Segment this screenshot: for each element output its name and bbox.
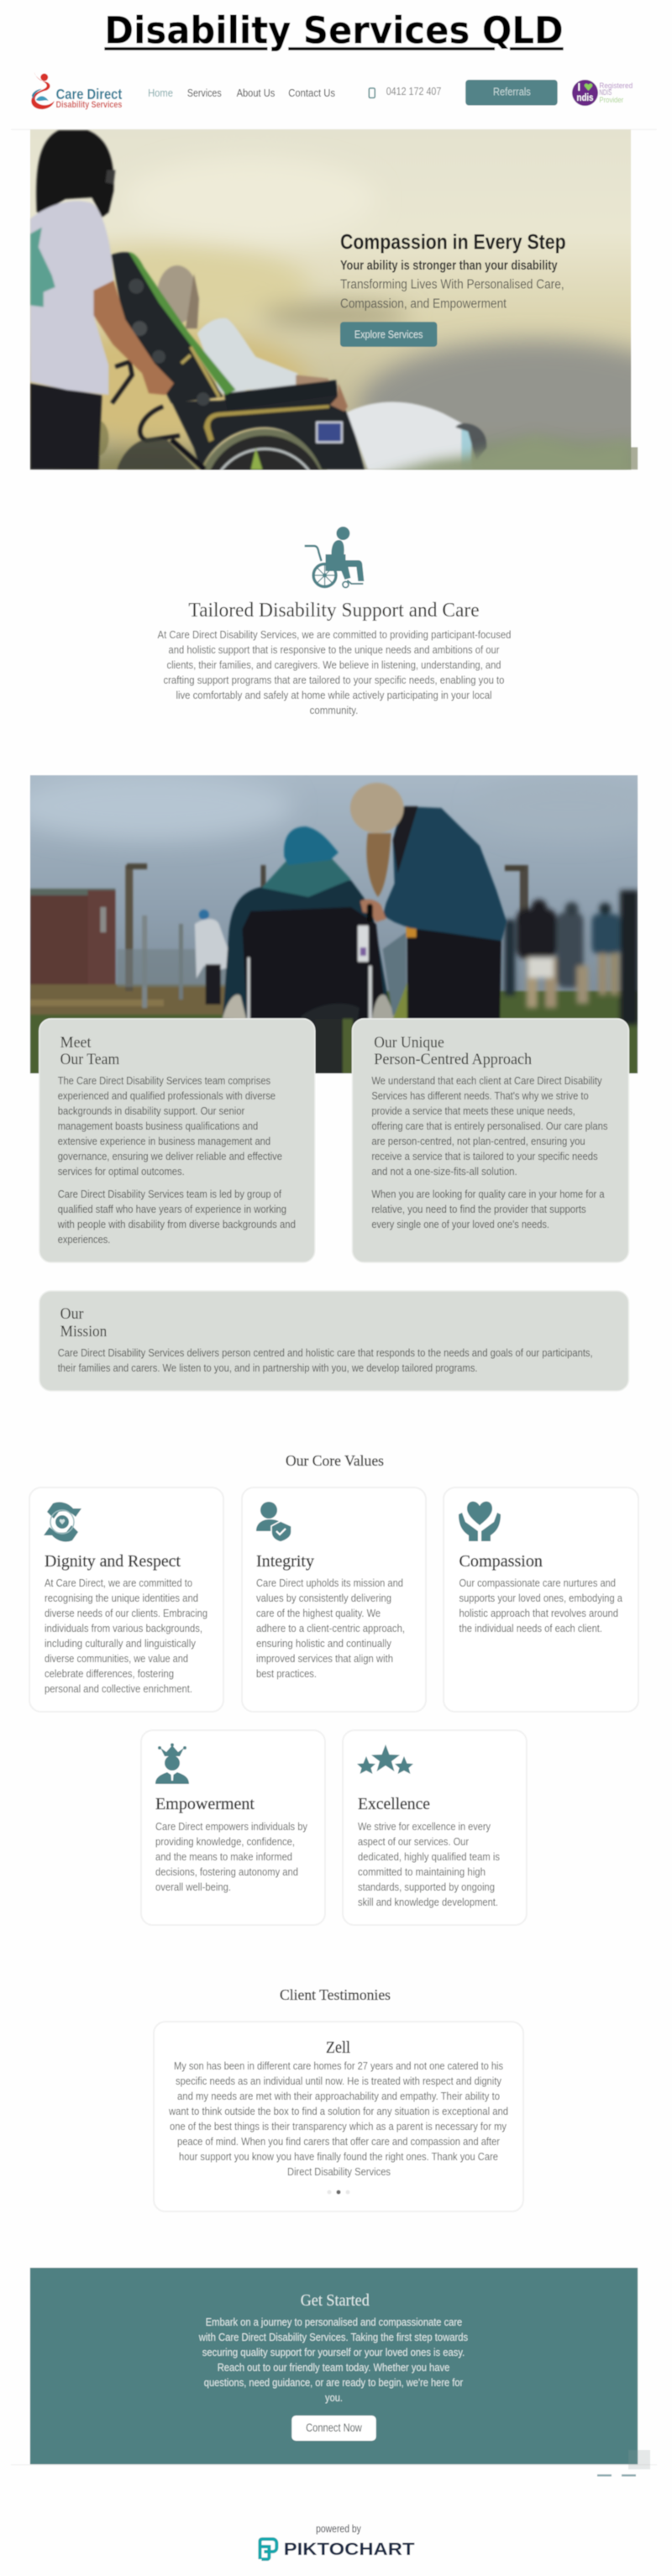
intro paragraph: crafting support programs that are tailored to your specific needs, enabling you to [164,674,505,686]
description: standards, supported by ongoing [358,1881,495,1893]
heading: Excellence [358,1795,430,1813]
description: the individual needs of each client. [459,1623,602,1634]
description: diverse needs of our clients. Embracing [45,1608,207,1619]
carer's arm [93,281,174,395]
testimonial text: hour support you know you have finally found the right ones. Thank you Care [179,2151,498,2163]
carer's hair [36,130,114,218]
footer: powered by piktochart [260,2522,415,2559]
team description: Care Direct Disability Services team is led by group of [58,1188,281,1200]
approach description: every single one of your loved one's needs. [371,1219,549,1230]
testimonial text: peace of mind. When you find carers that offer care and compassion and after [177,2136,500,2148]
logo wordmark: Care Direct [56,86,122,102]
tag [358,926,369,962]
intro paragraph: community. [310,705,358,716]
approach description: provide a service that meets these unique needs, [371,1105,575,1117]
heading: Our Team [60,1051,120,1068]
description: We strive for excellence in every [358,1821,491,1833]
icon: hands and heart [44,1502,81,1542]
intro paragraph: live comfortably and safely at home while actively participating in your local [176,690,492,701]
approach description: When you are looking for quality care in your home for a [371,1188,605,1200]
testimonial text: My son has been in different care homes for 27 years and not one catered to his [174,2060,503,2072]
card: empowerment [141,1730,325,1925]
hero subtext: Transforming Lives With Personalised Care, [340,278,564,292]
description [358,1821,500,1908]
heading: Meet [60,1034,92,1051]
description: Care Direct upholds its mission and [256,1577,403,1589]
photo: carer and wheelchair user outdoors [29,774,638,1074]
mission text [58,1347,593,1374]
testimonial text [168,2060,508,2178]
description: aspect of our services. Our [358,1836,469,1848]
button: referrals [465,80,558,106]
wheelchair user [223,880,393,1025]
call to action text: questions, need guidance, or are ready to begin, we're here for [204,2377,463,2389]
panel: our mission [39,1291,628,1391]
description: skill and knowledge development. [358,1897,498,1908]
handle and tubing [112,362,132,403]
phone number: 0412 172 407 [386,85,441,97]
button: connect now [291,2416,376,2441]
approach description: and not a one-size-fits-all solution. [371,1166,517,1178]
team description: governance, ensuring we deliver reliable and effective [58,1151,282,1162]
hero subtext [340,278,564,311]
description: personal and collective enrichment. [45,1683,192,1695]
title: Disability Services QLD [104,9,564,52]
call to action text: you. [325,2392,343,2404]
description: including culturally and linguistically [45,1638,197,1650]
background crowd [505,890,638,1025]
poles [125,865,133,991]
navigation links: About Us [237,87,276,99]
testimonial text: specific needs as an individual until now. He is treated with respect and dignity [176,2075,502,2087]
chair back [111,252,223,403]
call to action text: Reach out to our friendly team today. Whether you have [218,2362,449,2374]
mission text: their families and carers. We listen to you, and in partnership with you, we develop tailored programs. [58,1362,478,1374]
heading: Dignity and Respect [45,1552,181,1571]
button: connect now: Connect Now [306,2421,363,2434]
heading: Compassion [459,1552,543,1571]
heading: Mission [60,1323,107,1340]
heading: Get Started [301,2291,370,2310]
team description: with people with disability from diverse backgrounds and [57,1219,296,1230]
team description: experiences. [58,1234,110,1246]
call to action text: with Care Direct Disability Services. Taking the first step towards [198,2332,468,2343]
description: individuals from various backgrounds, [45,1623,202,1634]
mission text: Care Direct Disability Services delivers person centred and holistic care that responds to the needs and goals of our participants, [58,1347,593,1359]
description: supports your loved ones, embodying a [459,1592,622,1604]
carer's hair [366,833,391,897]
hero section [29,129,638,470]
icon: piktochart logo [260,2539,276,2559]
approach description [371,1075,608,1230]
carer's shirt print [30,228,55,307]
heading: Tailored Disability Support and Care [188,600,480,622]
powered by text: powered by [316,2522,361,2535]
testimonial text: and my needs are met with their approachability and empathy. Their ability to [177,2091,500,2102]
description: celebrate differences, fostering [45,1668,174,1680]
carer [406,927,502,1018]
card: excellence [343,1730,527,1925]
description [45,1577,207,1695]
carousel dashes [597,2474,636,2476]
man's shirt [197,318,297,396]
team description: extensive experience in business management and [58,1136,270,1147]
testimonial text: Direct Disability Services [287,2166,391,2178]
icon: Care Direct logo [31,72,55,109]
navigation links: Contact Us [288,87,335,99]
heading: our core values: Our Core Values [286,1452,384,1469]
hero tagline: Your ability is stronger than your disability [340,259,558,273]
panel: meet our team [39,1019,315,1262]
carer's pants [30,383,102,470]
description [256,1577,405,1680]
description: holistic approach that revolves around [459,1608,618,1619]
button: referrals: Referrals [493,85,531,98]
description: ensuring holistic and continually [256,1638,392,1650]
description: providing knowledge, confidence, [155,1836,295,1848]
panel: person-centred approach [352,1019,628,1262]
heading: Our Unique [374,1034,444,1051]
team description: management boasts business qualifications and [58,1120,258,1132]
wheel rear [203,428,328,470]
chair body [171,385,365,470]
button: explore services [340,322,437,347]
intro paragraph: and holistic support that is responsive to the unique needs and ambitions of our [168,644,500,656]
gap vegetation [392,983,409,1019]
blanket [347,401,472,470]
icon: hands holding heart [459,1502,501,1541]
wordmark: PIKTOCHART [284,2540,415,2559]
description: committed to maintaining high [358,1866,486,1878]
description: adhere to a client-centric approach, [256,1623,405,1634]
intro section [158,527,511,716]
approach description: are person-centred, not plan-centred, ensuring you [371,1136,585,1147]
background figure [199,910,209,920]
team description: backgrounds in disability support. Our senior [58,1105,244,1117]
icon: person with shield [256,1502,291,1542]
intro paragraph: clients, their families, and caregivers. We believe in listening, understanding, and [167,659,501,671]
testimonial author: Zell [326,2038,350,2057]
hero photo: carer with wheelchair user [29,129,638,470]
carer's hat [350,783,404,833]
call to action text [198,2316,468,2404]
testimonial text: want to think outside the box to find a solution for any situation is exceptional and [168,2106,508,2117]
icon: crowned person [155,1744,189,1784]
navigation header [31,72,633,110]
description: overall well-being. [155,1881,231,1893]
description: care of the highest quality. We [256,1608,381,1619]
call to action text: Embark on a journey to personalised and compassionate care [206,2316,462,2328]
team description: qualified staff who have years of experience in working [58,1204,286,1215]
description: Our compassionate care nurtures and [459,1577,616,1589]
description [155,1821,308,1893]
heading: Integrity [256,1552,314,1571]
description: diverse communities, we value and [45,1653,188,1665]
card: integrity [242,1487,426,1712]
NDIS registered provider text [599,81,633,104]
description: and the means to make informed [155,1851,292,1863]
man's head [157,265,197,323]
navigation links: Home [148,87,173,99]
NDIS registered provider text: NDIS [599,88,612,97]
icon: NDIS badge: I [578,81,580,93]
heading: Empowerment [155,1795,255,1813]
NDIS registered provider text: Registered [599,81,633,90]
heading [60,1305,107,1340]
heading: Our [60,1305,83,1322]
approach description: We understand that each client at Care Direct Disability [371,1075,602,1087]
team description: experienced and qualified professionals with diverse [58,1090,276,1102]
description: Care Direct empowers individuals by [155,1821,308,1833]
NDIS registered provider text: Provider [599,96,623,104]
grass [381,438,632,470]
panel: get started [30,2268,638,2464]
card: testimonial [154,2022,523,2211]
carousel dots [328,2190,349,2194]
card: dignity and respect [29,1487,223,1712]
carer's hand [360,900,386,922]
team description [57,1075,296,1246]
logo wordmark [56,86,122,110]
icon: NDIS badge [572,80,598,106]
scroll-to-top widget [628,2450,650,2469]
heading [374,1034,532,1068]
logo wordmark: Disability Services [56,100,122,110]
heading: client testimonies: Client Testimonies [280,1986,391,2003]
team description: services for optimal outcomes. [58,1166,185,1178]
description: values by consistently delivering [256,1592,391,1604]
approach description: Services has different needs. That's why we strive to [371,1090,589,1102]
approach description: offering care that is entirely personalised. Our care plans [371,1120,608,1132]
approach description: relative, you need to find the provider that supports [371,1204,586,1215]
intro paragraph [158,629,511,716]
description: dedicated, highly qualified team is [358,1851,500,1863]
heading: Person-Centred Approach [374,1051,532,1068]
building [30,890,115,984]
description [459,1577,622,1634]
icon: wheelchair user [305,527,364,588]
icon: phone [369,88,375,97]
description: At Care Direct, we are committed to [45,1577,192,1589]
icon: NDIS badge: ndis [577,92,594,103]
description: improved services that align with [256,1653,393,1665]
team description: The Care Direct Disability Services team comprises [58,1075,270,1087]
heading [60,1034,120,1068]
description: best practices. [256,1668,317,1680]
card: compassion [444,1487,638,1712]
description: recognising the unique identities and [45,1592,198,1604]
navigation links [148,87,335,99]
call to action text: securing quality support for yourself or your loved ones is easy. [202,2347,465,2358]
navigation links: Services [187,87,222,99]
approach description: receive a service that is tailored to your specific needs [371,1151,598,1162]
intro paragraph: At Care Direct Disability Services, we are committed to providing participant-focused [158,629,511,641]
icon: three stars [357,1744,413,1774]
carer's shirt [30,201,113,395]
hero heading: Compassion in Every Step [340,231,566,254]
description: decisions, fostering autonomy and [155,1866,298,1878]
hero subtext: Compassion, and Empowerment [340,297,507,311]
testimonial text: one of the best things is their transparency which as a parent is necessary for my [170,2121,507,2133]
button: explore services: Explore Services [354,328,423,341]
